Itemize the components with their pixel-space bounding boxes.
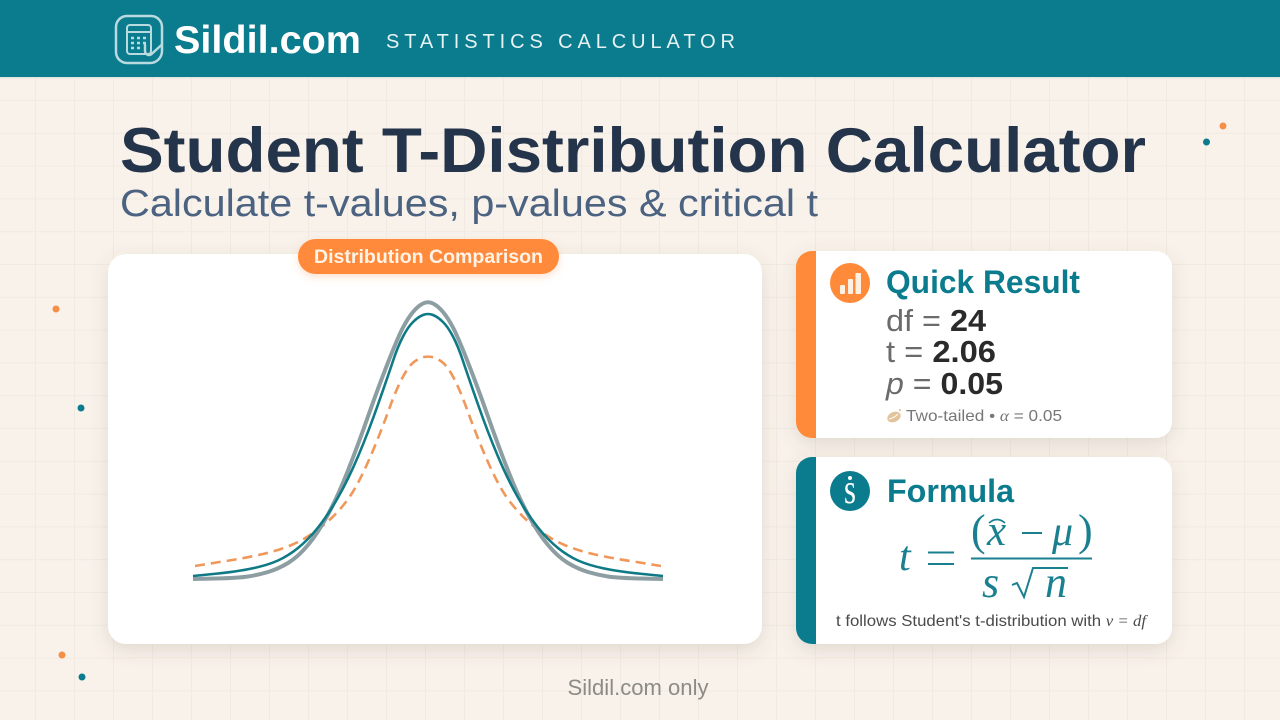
formula: t statistic: s xyxy=(982,558,999,607)
panel: distribution comparison chart xyxy=(108,239,762,644)
formula: t statistic: μ xyxy=(1051,509,1073,555)
formula: t statistic: t xyxy=(899,534,912,580)
badge: Distribution Comparison: Distribution Comparison xyxy=(314,247,543,268)
curve: gray normal xyxy=(193,302,663,579)
icon: small seed xyxy=(886,409,902,424)
badge: Distribution Comparison xyxy=(298,239,559,274)
title: Student T-Distribution Calculator xyxy=(120,116,1146,186)
icon: s symbol: s xyxy=(844,467,856,513)
formula: t statistic: ( xyxy=(971,506,986,555)
brand name: Sildil.com xyxy=(174,19,361,62)
panel: formula xyxy=(796,457,1172,644)
result: p: p = 0.05 xyxy=(885,366,1003,401)
curve: teal t-distribution xyxy=(193,314,663,576)
chart: distribution curves xyxy=(193,302,663,579)
formula: t statistic xyxy=(899,506,1093,607)
note: t follows distribution: t follows Student's t-distribution with ν = df xyxy=(836,613,1149,630)
header bar xyxy=(0,0,1280,78)
heading: Quick Result: Quick Result xyxy=(886,264,1080,300)
curve: orange dashed heavy-tailed xyxy=(195,357,661,566)
icon: bar chart xyxy=(830,263,870,303)
formula: t statistic: ) xyxy=(1078,506,1093,555)
icon: calculator logo xyxy=(116,16,162,63)
header tagline: STATISTICS CALCULATOR xyxy=(386,31,735,53)
formula: t statistic: x xyxy=(986,508,1006,555)
heading: Formula: Formula xyxy=(887,473,1014,509)
formula: t statistic: n xyxy=(1045,558,1067,607)
icon: s symbol xyxy=(830,467,870,513)
note: two-tailed alpha: Two-tailed • α = 0.05 xyxy=(906,408,1062,425)
result: t: t = 2.06 xyxy=(886,334,996,369)
footer text: Sildil.com only xyxy=(568,675,708,700)
result: df: df = 24 xyxy=(886,303,987,338)
subtitle: Calculate t-values, p-values & critical t xyxy=(120,183,818,225)
decorative dots xyxy=(52,122,1226,680)
panel: quick result xyxy=(796,251,1172,438)
